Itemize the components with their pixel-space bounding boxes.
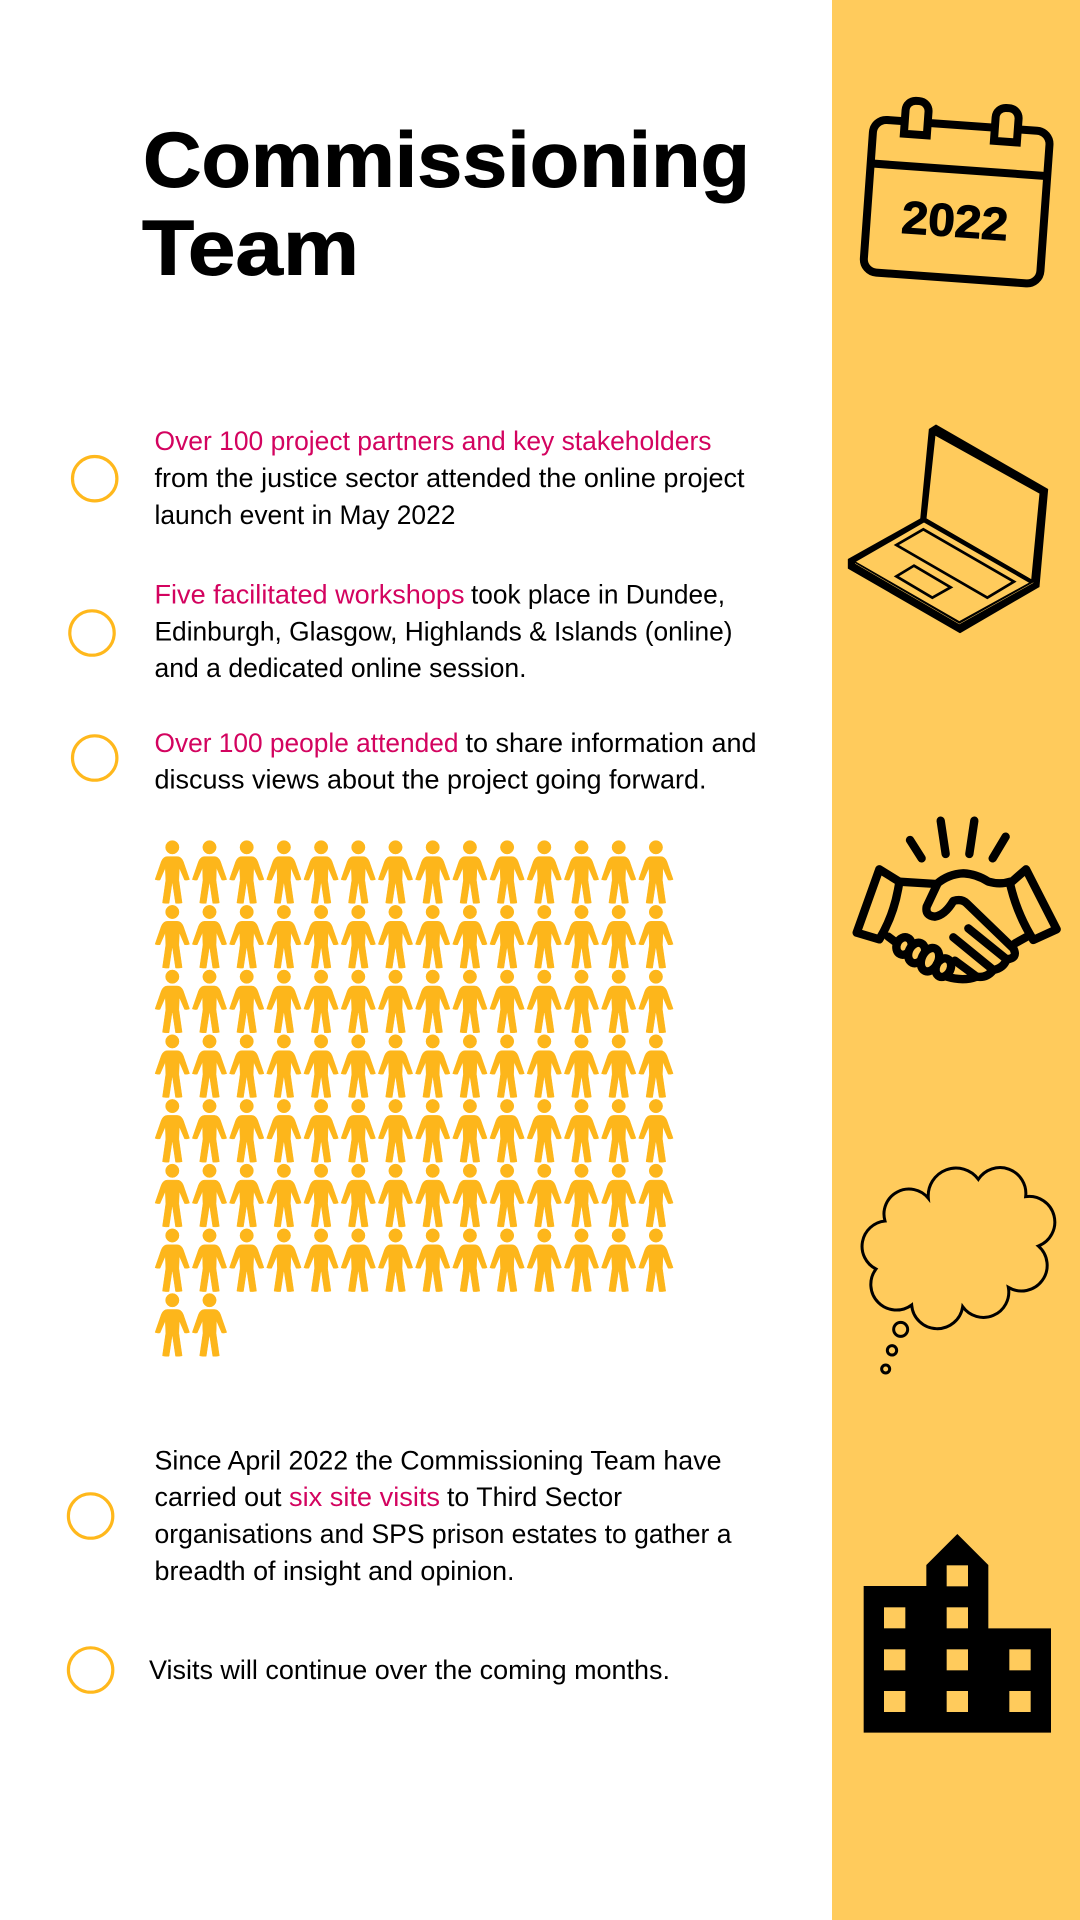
title: Team — [142, 203, 359, 291]
icon: laptop — [848, 425, 1048, 633]
text block: site visits: breadth of insight and opinion. — [154, 1556, 514, 1586]
pictogram: 100 people attended — [155, 841, 673, 1356]
icon: calendar 2022: 2022 — [900, 191, 1010, 250]
bullet marker: site visits — [68, 1494, 113, 1538]
text block: project partners: Over 100 project partners and key stakeholders — [154, 426, 712, 456]
text block: site visits: to Third Sector — [447, 1482, 622, 1512]
icon: thought bubble — [862, 1168, 1055, 1373]
text block: workshops: took place in Dundee, — [471, 580, 725, 610]
text block: workshops — [154, 580, 732, 683]
bullet marker: workshops — [70, 611, 114, 655]
bullet marker: attendance — [72, 736, 117, 780]
text block: attendance: to share information and — [466, 728, 756, 758]
bullet marker: project partners — [72, 456, 117, 501]
title: Commissioning — [143, 116, 750, 204]
text block: workshops: Edinburgh, Glasgow, Highlands & Islands (online) — [154, 616, 732, 646]
text block: project partners: launch event in May 2022 — [154, 500, 456, 530]
icon: handshake — [857, 821, 1057, 980]
text block: attendance — [154, 728, 756, 795]
title — [142, 116, 750, 291]
panel: yellow icon sidebar — [832, 0, 1080, 1920]
text block: attendance: Over 100 people attended — [154, 728, 458, 758]
text block: workshops: and a dedicated online session. — [154, 653, 526, 683]
icon: building — [864, 1534, 1051, 1733]
icon: calendar 2022 — [863, 98, 1052, 284]
text block: site visits — [154, 1445, 732, 1586]
text block: continuing visits: Visits will continue over the coming months. — [149, 1655, 670, 1685]
text block: attendance: discuss views about the project going forward. — [154, 765, 706, 795]
text block: site visits: organisations and SPS prison estates to gather a — [154, 1519, 732, 1549]
text block: project partners: from the justice sector attended the online project — [154, 463, 745, 493]
text block: workshops: Five facilitated workshops — [154, 580, 464, 610]
text block: site visits: carried out — [154, 1482, 282, 1512]
text block: project partners — [154, 426, 745, 530]
text block: site visits: Since April 2022 the Commissioning Team have — [154, 1445, 722, 1475]
bullet marker: continuing visits — [68, 1648, 113, 1692]
text block: site visits: six site visits — [289, 1482, 440, 1512]
